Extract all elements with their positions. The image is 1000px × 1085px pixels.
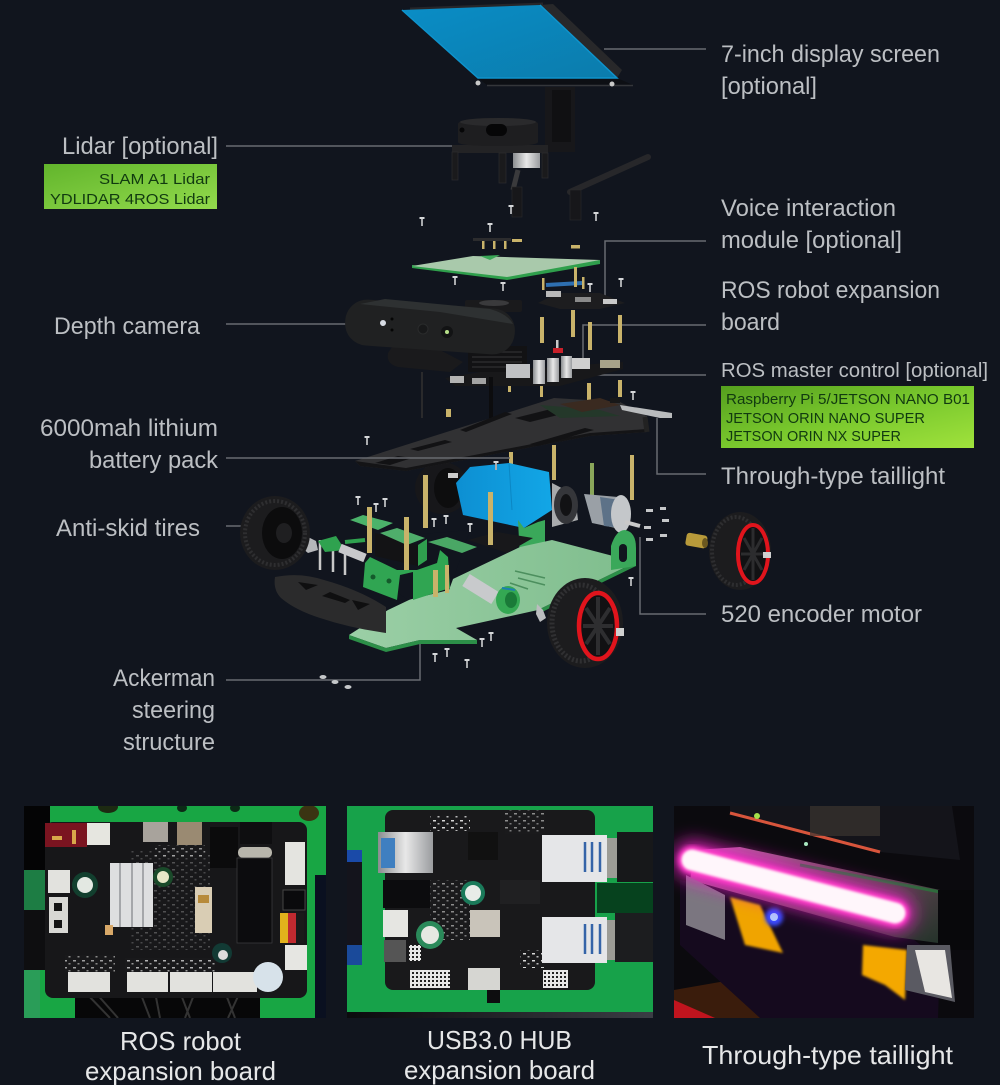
gold posts under plate [423, 445, 634, 528]
label: expansion board [721, 277, 940, 336]
caption: ROS robot expansion board: ROS robot [120, 1026, 242, 1056]
label: steering: structure [123, 729, 215, 756]
callout: master control options: JETSON ORIN NANO SUPER [726, 410, 925, 427]
label: voice module: Voice interaction [721, 195, 896, 222]
usb ports [597, 883, 653, 913]
label: voice module [721, 195, 902, 254]
photo: through-type taillight [674, 806, 974, 1018]
label: master control: ROS master control [optional] [721, 360, 988, 382]
hub board [385, 810, 595, 990]
caption: USB3.0 HUB expansion board: expansion board [404, 1055, 595, 1085]
label: expansion board: ROS robot expansion [721, 277, 940, 304]
screws bottom [320, 496, 669, 689]
photo: USB3.0 HUB board [347, 806, 653, 1018]
steering linkage [302, 536, 365, 575]
callout: lidar models: YDLIDAR 4ROS Lidar [50, 191, 210, 208]
ros master control board [445, 340, 623, 386]
rear left wheel (behind plate) [415, 462, 469, 514]
exploded robot diagram [226, 4, 771, 689]
label: battery: battery pack [89, 447, 219, 474]
label: steering: steering [132, 697, 215, 724]
label: depth camera: Depth camera [54, 313, 201, 340]
callout: master control options [721, 386, 974, 448]
caption: ROS robot expansion board [85, 1026, 276, 1085]
battery pack [448, 461, 552, 528]
label: display screen: 7-inch display screen [721, 41, 940, 68]
label: lidar: Lidar [optional] [62, 133, 218, 160]
front tire with red rim [536, 578, 624, 668]
label: expansion board: board [721, 309, 780, 336]
left tire [240, 496, 310, 570]
callout: lidar models [44, 164, 217, 209]
label: display screen [721, 41, 940, 100]
label: steering [113, 665, 215, 756]
lidar [452, 118, 548, 183]
middle chassis plate [355, 398, 647, 471]
callout: master control options: Raspberry Pi 5/JETSON NANO B01 [726, 391, 970, 408]
caption: through-type taillight: Through-type taillight [702, 1040, 954, 1070]
centre steering hub [466, 580, 520, 614]
display screen [402, 4, 633, 86]
black support rods [421, 372, 493, 432]
steering servo and bracket [363, 507, 477, 600]
front post on battery [488, 492, 493, 545]
label: tires: Anti-skid tires [56, 515, 200, 542]
label: battery: 6000mah lithium [40, 415, 218, 442]
screws top [364, 205, 636, 445]
depth camera [344, 298, 516, 372]
callout: master control options: JETSON ORIN NX SUPER [726, 428, 901, 445]
label: voice module: module [optional] [721, 227, 902, 254]
label: steering: Ackerman [113, 665, 215, 692]
standoffs middle [446, 310, 622, 417]
label: taillight: Through-type taillight [721, 463, 945, 490]
leader lines [226, 49, 706, 680]
small green brackets and plates [350, 515, 545, 560]
ros robot expansion board part [538, 267, 625, 309]
caption: USB3.0 HUB expansion board [404, 1025, 595, 1085]
motor arch bracket [611, 530, 636, 570]
right tire with red rim [709, 512, 771, 590]
voice interaction module [412, 238, 600, 280]
callout: lidar models: SLAM A1 Lidar [99, 171, 210, 188]
photo: ROS robot expansion board [24, 801, 326, 1018]
circuit board [45, 822, 307, 998]
screen mount bracket [545, 87, 575, 152]
antennas [512, 157, 648, 220]
label: display screen: [optional] [721, 73, 817, 100]
label: motor: 520 encoder motor [721, 601, 922, 628]
through-type taillight part [620, 405, 672, 432]
brass coupling [685, 532, 708, 549]
caption: USB3.0 HUB expansion board: USB3.0 HUB [427, 1025, 572, 1055]
label: battery [40, 415, 219, 474]
cooling fan [465, 300, 522, 312]
encoder motor [552, 483, 640, 533]
battery leader line [226, 457, 510, 459]
base chassis plate [349, 540, 636, 652]
bumper [275, 575, 386, 633]
